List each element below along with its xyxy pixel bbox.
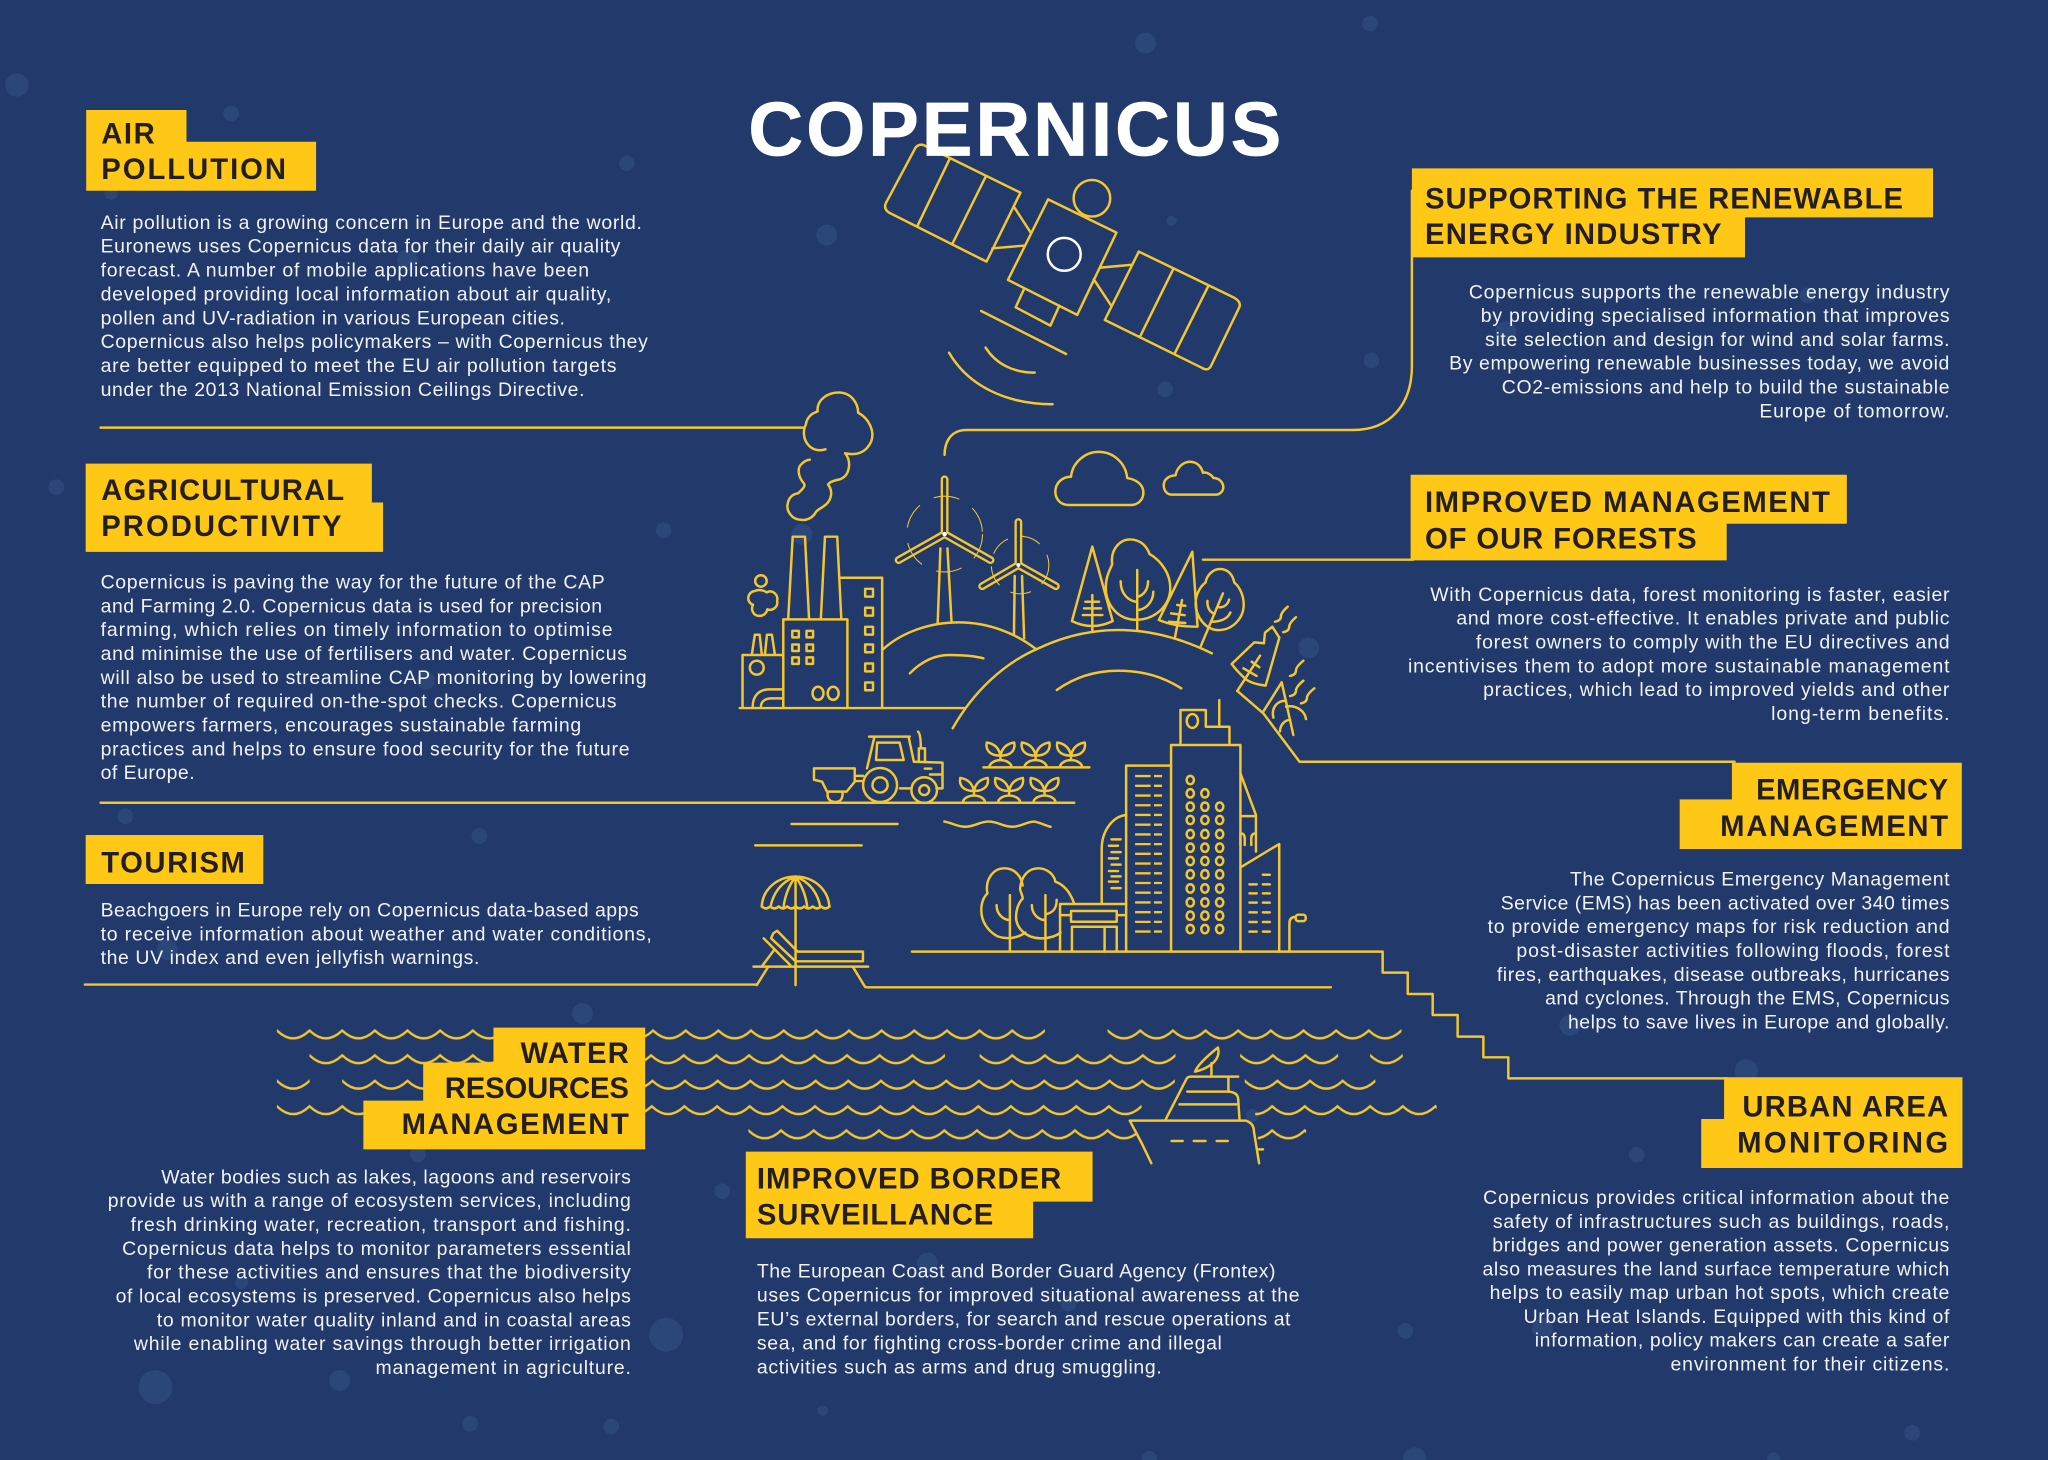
text: agricultural productivity: farming, which relies on timely information to optimise [101,619,613,641]
heading: supporting the renewable energy industry: ENERGY INDUSTRY [1425,219,1722,251]
panel: agricultural productivity [86,464,647,784]
text: water resources management [108,1166,631,1379]
illustration: sea waves [277,1028,1437,1142]
text: agricultural productivity: empowers farmers, encourages sustainable farming [101,715,581,737]
text: agricultural productivity: Copernicus is paving the way for the future of the CAP [101,572,605,594]
text: improved management of our forests: long-term benefits. [1771,703,1950,725]
text: improved border surveillance [757,1261,1300,1378]
icon: ship [1130,1048,1263,1163]
text: emergency management: and cyclones. Through the EMS, Copernicus [1545,988,1950,1010]
text: urban area monitoring: information, policy makers can create a safer [1535,1330,1950,1352]
panel: supporting the renewable energy industry [1412,168,1950,422]
panel: urban area monitoring [1482,1077,1962,1376]
panel: improved management of our forests [1408,475,1950,725]
heading: agricultural productivity [86,464,383,552]
illustration: tractor [814,732,942,803]
text: emergency management: helps to save lives in Europe and globally. [1568,1011,1949,1033]
text: water resources management: Copernicus data helps to monitor parameters essential [122,1238,631,1260]
text: water resources management: management in agriculture. [376,1357,631,1379]
text: supporting the renewable energy industry: Copernicus supports the renewable energy industry [1469,281,1950,303]
illustration: burning forest [1232,607,1314,762]
heading: water resources management: MANAGEMENT [402,1109,629,1141]
heading: water resources management: WATER [520,1038,629,1070]
text: emergency management: to provide emergency maps for risk reduction and [1488,916,1950,938]
text: air pollution: Copernicus also helps policymakers – with Copernicus they [101,331,648,353]
text: air pollution: are better equipped to meet the EU air pollution targets [101,355,617,377]
text: air pollution: pollen and UV-radiation in various European cities. [101,307,565,329]
text: agricultural productivity [100,572,647,784]
panel: emergency management [1488,763,1962,1033]
text: agricultural productivity: will also be used to streamline CAP monitoring by lowering [100,667,647,689]
illustration: hills [882,622,1212,728]
panel: water resources management [108,1028,645,1379]
text: agricultural productivity: of Europe. [101,762,195,784]
text: air pollution: under the 2013 National Emission Ceilings Directive. [101,379,584,401]
text: urban area monitoring: environment for their citizens. [1671,1354,1949,1376]
heading: urban area monitoring: URBAN AREA [1742,1092,1948,1124]
text: urban area monitoring: helps to easily map urban hot spots, which create [1490,1282,1949,1304]
title: COPERNICUS [748,87,1281,172]
heading: emergency management [1680,763,1962,849]
text: emergency management: The Copernicus Emergency Management [1570,869,1950,891]
text: urban area monitoring [1482,1187,1950,1376]
panel: improved border surveillance [746,1152,1300,1378]
text: supporting the renewable energy industry: by providing specialised information that improves [1481,305,1950,327]
text: improved management of our forests: With Copernicus data, forest monitoring is faster, easier [1430,584,1950,606]
panel: air pollution [86,110,648,401]
text: water resources management: while enabling water savings through better irrigation [133,1333,631,1355]
text: emergency management [1488,869,1950,1033]
text: water resources management: provide us with a range of ecosystem services, including [108,1190,631,1212]
text: urban area monitoring: Copernicus provides critical information about the [1483,1187,1949,1209]
text: supporting the renewable energy industry: site selection and design for wind and solar farms. [1485,329,1950,351]
text: air pollution: Air pollution is a growing concern in Europe and the world. [101,212,642,234]
text: supporting the renewable energy industry: By empowering renewable businesses today, we avoid [1449,353,1949,375]
illustration: beach umbrella and lounger [754,877,868,987]
text: supporting the renewable energy industry [1449,281,1950,422]
illustration: plants [960,743,1089,803]
text: air pollution: forecast. A number of mobile applications have been [101,260,589,282]
text: agricultural productivity: practices and helps to ensure food security for the future [101,738,630,760]
text: improved management of our forests [1408,584,1950,725]
heading: urban area monitoring [1701,1077,1962,1168]
text: improved management of our forests: and more cost-effective. It enables private and public [1456,608,1950,630]
illustration: city [981,700,1306,952]
text: improved border surveillance: EU’s external borders, for search and rescue operations at [757,1308,1291,1330]
text: water resources management: to monitor water quality inland and in coastal areas [157,1309,631,1331]
heading: agricultural productivity: PRODUCTIVITY [101,511,342,543]
text: tourism: Beachgoers in Europe rely on Copernicus data-based apps [101,900,639,922]
text: air pollution [101,212,648,401]
text: agricultural productivity: the number of required on-the-spot checks. Copernicus [101,691,617,713]
heading: emergency management: MANAGEMENT [1720,811,1948,843]
text: supporting the renewable energy industry: CO2-emissions and help to build the sustainable [1502,377,1950,399]
heading: improved border surveillance [746,1152,1093,1238]
heading: air pollution: AIR [101,118,155,150]
text: water resources management: Water bodies such as lakes, lagoons and reservoirs [161,1166,631,1188]
heading: improved management of our forests [1411,475,1847,560]
text: urban area monitoring: Urban Heat Islands. Equipped with this kind of [1524,1306,1950,1328]
text: improved management of our forests: forest owners to comply with the EU directives and [1476,631,1950,653]
text: tourism [101,900,652,969]
text: improved management of our forests: practices, which lead to improved yields and other [1483,679,1950,701]
text: agricultural productivity: and Farming 2.0. Copernicus data is used for precision [101,595,602,617]
text: urban area monitoring: also measures the land surface temperature which [1482,1258,1949,1280]
illustration: factory and smoke [740,392,965,708]
heading: urban area monitoring: MONITORING [1737,1128,1948,1160]
heading: water resources management: RESOURCES [445,1073,629,1105]
text: improved border surveillance: The European Coast and Border Guard Agency (Frontex) [757,1261,1275,1283]
heading: air pollution [86,110,316,191]
text: agricultural productivity: and minimise the use of fertilisers and water. Copernicus [101,643,627,665]
illustration: forest [1072,539,1244,646]
text: supporting the renewable energy industry: Europe of tomorrow. [1759,400,1950,422]
heading: improved management of our forests: OF OUR FORESTS [1425,524,1697,556]
text: emergency management: Service (EMS) has been activated over 340 times [1501,892,1950,914]
text: air pollution: developed providing local information about air quality, [101,283,611,305]
illustration: wind turbines [899,479,1056,638]
illustration: field and water strokes [755,822,1051,845]
text: urban area monitoring: safety of infrastructures such as buildings, roads, [1493,1211,1949,1233]
heading: emergency management: EMERGENCY [1756,774,1949,806]
text: emergency management: fires, earthquakes, disease outbreaks, hurricanes [1497,964,1950,986]
heading: improved border surveillance: SURVEILLANCE [757,1199,993,1231]
text: water resources management: of local ecosystems is preserved. Copernicus also helps [116,1285,631,1307]
connector lines [85,191,1735,1078]
panel: tourism [86,835,652,969]
text: urban area monitoring: bridges and power generation assets. Copernicus [1492,1235,1950,1257]
text: air pollution: Euronews uses Copernicus data for their daily air quality [101,236,621,258]
heading: improved management of our forests: IMPROVED MANAGEMENT [1425,487,1830,519]
text: water resources management: fresh drinking water, recreation, transport and fishing. [131,1214,631,1236]
heading: agricultural productivity: AGRICULTURAL [101,475,344,507]
text: emergency management: post-disaster activities following floods, forest [1516,940,1950,962]
icon: satellite [885,145,1240,404]
illustration: clouds [1055,452,1223,505]
text: water resources management: for these activities and ensures that the biodiversity [147,1262,631,1284]
heading: air pollution: POLLUTION [101,154,286,186]
text: tourism: to receive information about weather and water conditions, [101,923,652,945]
text: improved border surveillance: activities such as arms and drug smuggling. [757,1356,1162,1378]
text: improved border surveillance: uses Copernicus for improved situational awareness at the [757,1285,1300,1307]
text: tourism: the UV index and even jellyfish warnings. [101,947,479,969]
text: improved border surveillance: sea, and for fighting cross-border crime and illegal [757,1332,1222,1354]
heading: water resources management [363,1028,645,1149]
heading: tourism [86,835,263,884]
heading: tourism: TOURISM [101,847,245,879]
heading: improved border surveillance: IMPROVED BORDER [757,1163,1061,1195]
text: improved management of our forests: incentivises them to adopt more sustainable management [1408,655,1950,677]
heading: supporting the renewable energy industry [1412,168,1933,257]
heading: supporting the renewable energy industry: SUPPORTING THE RENEWABLE [1425,183,1903,215]
